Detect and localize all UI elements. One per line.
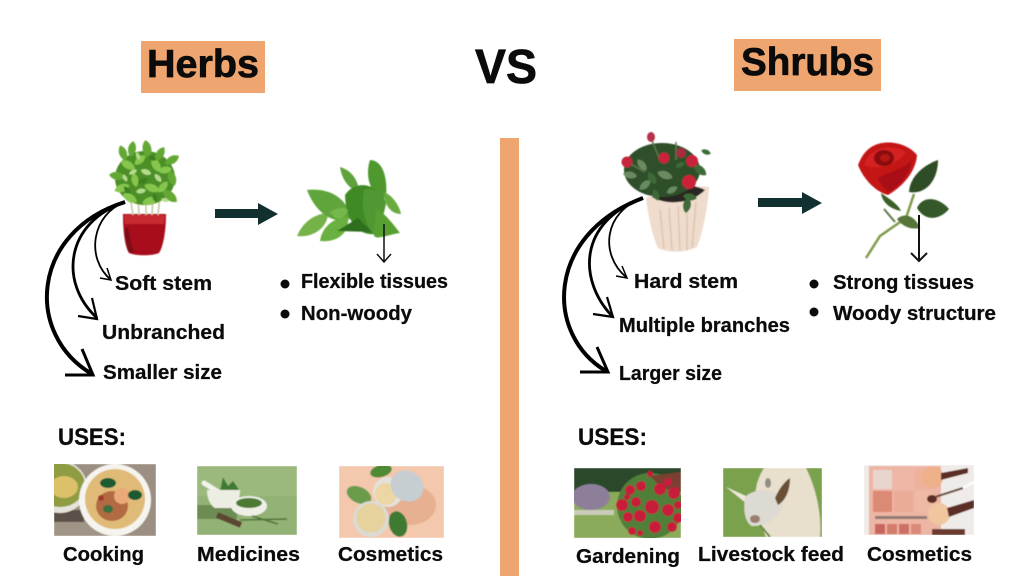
text: multiple branches: Multiple branches — [619, 315, 790, 337]
label: medicines: Medicines — [197, 544, 300, 566]
text: smaller size: Smaller size — [103, 362, 222, 384]
arrow: to hard stem — [609, 198, 643, 278]
heading: uses: USES: — [578, 424, 647, 451]
divider — [500, 138, 519, 576]
list: shrub tissue traits — [810, 272, 996, 325]
arrow: to soft stem — [95, 202, 125, 280]
image: gardening — [572, 468, 683, 539]
heading: Herbs: Herbs — [147, 43, 259, 86]
panel: shrubs — [564, 39, 996, 568]
arrow: to larger size — [564, 198, 643, 372]
arrow: leaves to traits — [377, 224, 391, 262]
image: medicines — [197, 466, 297, 535]
list: shrub tissue traits: Woody structure — [833, 303, 996, 325]
image: goat — [723, 468, 822, 537]
image: eyeshadow palette — [864, 465, 974, 535]
label: gardening: Gardening — [576, 546, 680, 568]
heading: VS: VS — [475, 41, 537, 94]
heading: uses: USES: — [58, 424, 126, 451]
panel: herbs — [33, 41, 448, 566]
heading: Shrubs: Shrubs — [741, 41, 874, 84]
icon: red rose — [858, 143, 949, 258]
list: herb tissue traits: Flexible tissues — [301, 271, 448, 293]
label: livestock feed: Livestock feed — [698, 544, 844, 566]
list: herb tissue traits — [280, 271, 448, 325]
icon: potted rose bush — [622, 132, 712, 252]
icon: mint leaves — [297, 160, 401, 241]
arrow: to unbranched — [73, 202, 125, 319]
icon: potted herb plant — [108, 139, 181, 255]
list: herb tissue traits: Non-woody — [301, 303, 413, 325]
image: cooking — [54, 464, 156, 536]
label: cosmetics: Cosmetics — [867, 544, 972, 566]
label: cosmetics: Cosmetics — [338, 544, 443, 566]
arrow: to smaller size — [47, 202, 125, 375]
text: larger size: Larger size — [619, 363, 722, 385]
list: shrub tissue traits: Strong tissues — [833, 272, 974, 294]
arrow: plant to flower — [758, 192, 822, 214]
text: hard stem: Hard stem — [634, 271, 738, 293]
arrow: to multiple branches — [589, 198, 643, 317]
text: soft stem: Soft stem — [115, 273, 212, 295]
image: cosmetics — [339, 462, 444, 539]
text: unbranched: Unbranched — [102, 322, 225, 344]
arrow: plant to leaves — [215, 203, 278, 225]
label: cooking: Cooking — [63, 544, 144, 566]
arrow: flower to traits — [911, 215, 927, 261]
